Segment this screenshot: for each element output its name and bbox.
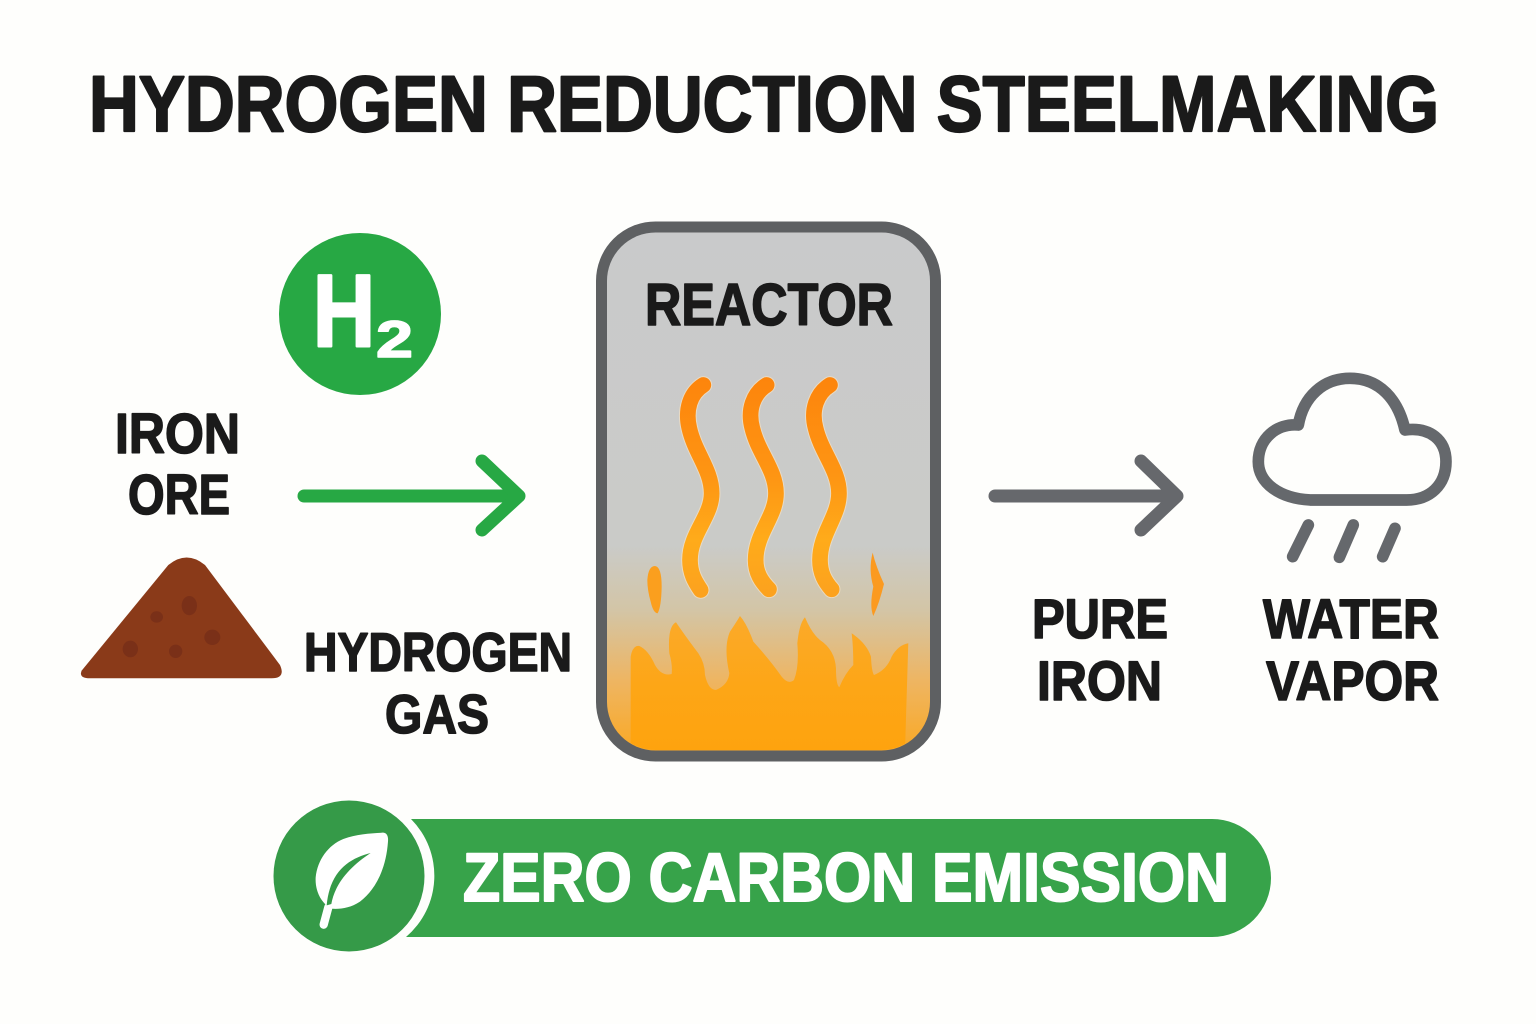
label: iron ore	[115, 402, 240, 527]
arrow: hydrogen input	[304, 461, 519, 530]
icon: leaf badge	[274, 800, 424, 952]
label: hydrogen gas: HYDROGEN	[304, 621, 572, 683]
icon: H2 circle: 2	[376, 311, 413, 369]
label: pure iron	[1032, 587, 1168, 712]
label: water vapor: VAPOR	[1266, 649, 1439, 712]
reactor vessel	[602, 227, 936, 756]
icon: H2 circle	[279, 233, 441, 395]
banner text: ZERO CARBON EMISSION	[463, 839, 1229, 916]
label: pure iron: PURE	[1032, 587, 1168, 650]
arrow: reactor output	[995, 461, 1177, 530]
icon: H2 circle: H	[313, 254, 375, 368]
banner bar	[406, 819, 1271, 937]
banner: zero carbon emission	[274, 800, 1271, 952]
label: iron ore: ORE	[128, 463, 230, 527]
label: hydrogen gas: GAS	[385, 683, 489, 745]
label: iron ore: IRON	[115, 402, 240, 466]
panel: reactor	[602, 227, 936, 756]
reactor label: REACTOR	[645, 272, 893, 338]
icon: cloud with rain	[1258, 378, 1446, 557]
label: water vapor	[1263, 587, 1439, 712]
label: water vapor: WATER	[1263, 587, 1439, 650]
icon: iron ore pile	[81, 557, 282, 678]
label: hydrogen gas	[304, 621, 572, 745]
label: pure iron: IRON	[1037, 649, 1162, 712]
heat waves and flames	[631, 385, 908, 752]
